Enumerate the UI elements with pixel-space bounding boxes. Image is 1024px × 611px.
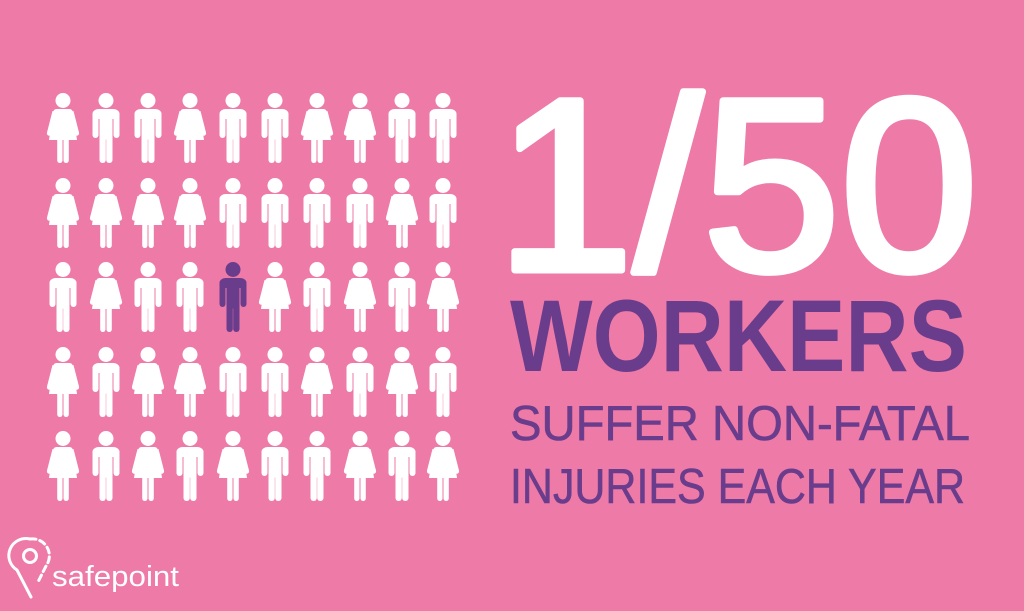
highlighted worker [220, 262, 246, 332]
people grid [47, 93, 459, 501]
icon: location pin [9, 538, 49, 597]
subtitle line 1: SUFFER NON-FATAL [510, 397, 970, 451]
row 5 [47, 431, 459, 501]
big statistic 1/50: 1/50 [496, 48, 978, 323]
logo: safepoint: safepoint [52, 561, 179, 593]
subtitle line 2: INJURIES EACH YEAR [510, 460, 965, 514]
row 1 [47, 93, 457, 163]
logo: safepoint [9, 538, 179, 597]
row 3 [50, 262, 459, 332]
row 2 [47, 178, 457, 248]
row 4 [47, 347, 457, 417]
